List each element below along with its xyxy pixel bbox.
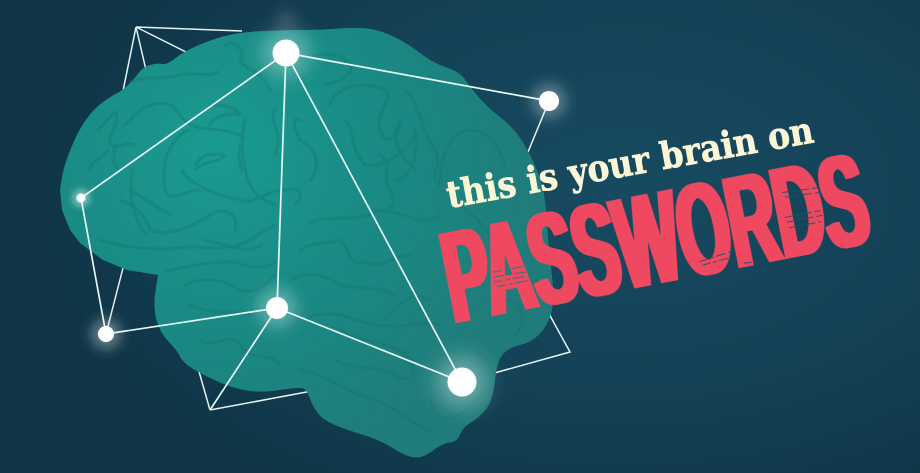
glow on brain behind top node xyxy=(244,11,328,95)
outer network lines behind brain xyxy=(106,27,570,410)
node: left xyxy=(76,194,86,202)
node: bottom xyxy=(448,368,476,396)
network nodes xyxy=(76,40,559,396)
brain folds xyxy=(88,43,522,430)
brain xyxy=(60,11,553,458)
subtitle: this is your brain on xyxy=(443,108,817,217)
node: right xyxy=(539,91,559,111)
node: lower left xyxy=(98,326,114,342)
node glows xyxy=(66,0,579,427)
node: centre xyxy=(266,297,288,319)
title: PASSWORDS: PASSWORDS xyxy=(432,126,880,352)
distressed scratches xyxy=(488,186,829,312)
node: top xyxy=(272,40,300,66)
network lines over brain xyxy=(81,53,549,410)
brain silhouette xyxy=(60,28,553,458)
